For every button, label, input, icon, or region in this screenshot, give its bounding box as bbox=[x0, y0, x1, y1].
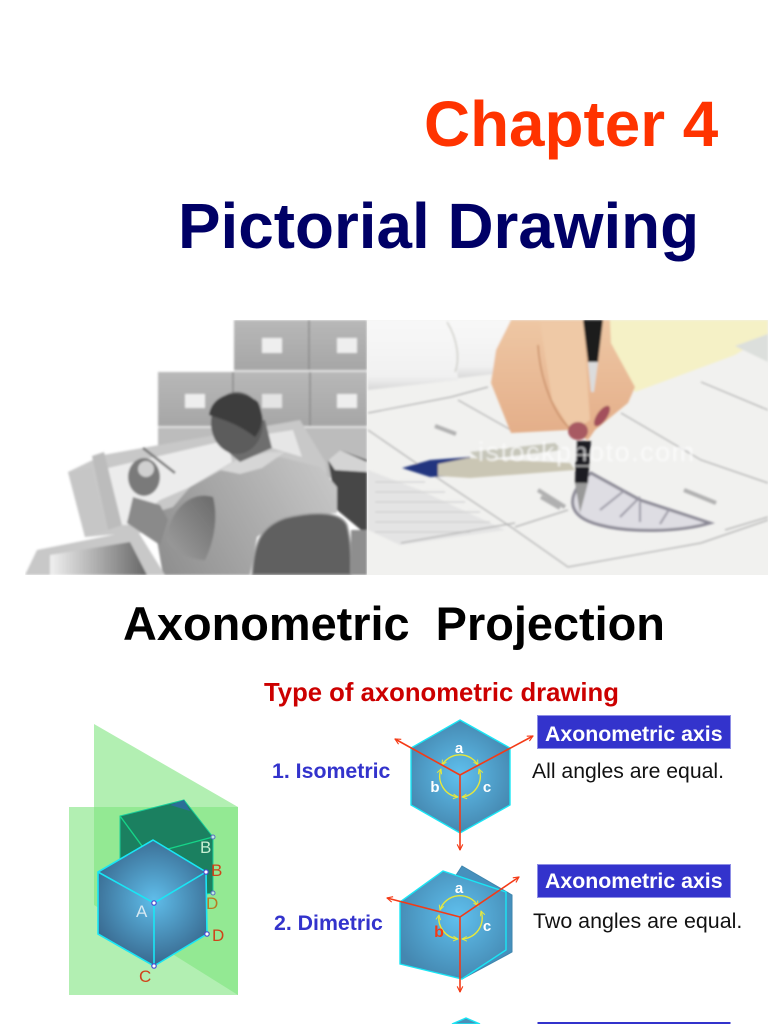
diagram: cube projected on planes: C bbox=[139, 967, 151, 986]
photo: draftsman at drawing board bbox=[25, 320, 367, 575]
diagram: isometric cube with axes: b bbox=[430, 779, 440, 796]
title: chapter number: Chapter 4 bbox=[424, 88, 719, 160]
label: dimetric: 2. Dimetric bbox=[274, 911, 383, 935]
photo: hand drawing on blueprint bbox=[367, 320, 768, 575]
label: axonometric axis, dimetric: Axonometric axis bbox=[545, 869, 723, 893]
diagram: isometric cube with axes: c bbox=[483, 779, 491, 796]
diagram: top of third cube bbox=[452, 1018, 480, 1024]
diagram: dimetric cube with axes: a bbox=[455, 880, 464, 897]
diagram: cube projected on planes: B bbox=[211, 861, 222, 880]
diagram: isometric cube with axes bbox=[395, 720, 533, 850]
title: pictorial drawing: Pictorial Drawing bbox=[178, 190, 699, 262]
diagram: dimetric cube with axes: c bbox=[483, 918, 491, 935]
label: axonometric axis, isometric: Axonometric axis bbox=[545, 722, 723, 746]
diagram: cube projected on planes: B bbox=[200, 838, 211, 857]
diagram: isometric cube with axes: a bbox=[455, 740, 464, 757]
diagram: cube projected on planes: A bbox=[136, 902, 148, 921]
diagram: dimetric cube with axes bbox=[387, 866, 519, 992]
label: axonometric axis, dimetric bbox=[538, 864, 730, 898]
label: isometric: 1. Isometric bbox=[272, 759, 391, 783]
diagram: cube projected on planes bbox=[69, 724, 238, 995]
label: axonometric axis, isometric bbox=[538, 716, 730, 748]
heading: axonometric projection: Axonometric Projection bbox=[123, 598, 665, 650]
diagram: cube projected on planes: D bbox=[212, 926, 224, 945]
diagram: cube projected on planes: D bbox=[206, 894, 218, 913]
text: two angles are equal: Two angles are equal. bbox=[533, 909, 742, 933]
text: all angles are equal: All angles are equal. bbox=[532, 760, 724, 783]
watermark text: istockphoto.com bbox=[478, 437, 696, 467]
subheading: type of axonometric drawing: Type of axonometric drawing bbox=[264, 679, 619, 707]
label: top of third axis box bbox=[538, 1022, 730, 1024]
diagram: dimetric cube with axes: b bbox=[434, 924, 444, 941]
